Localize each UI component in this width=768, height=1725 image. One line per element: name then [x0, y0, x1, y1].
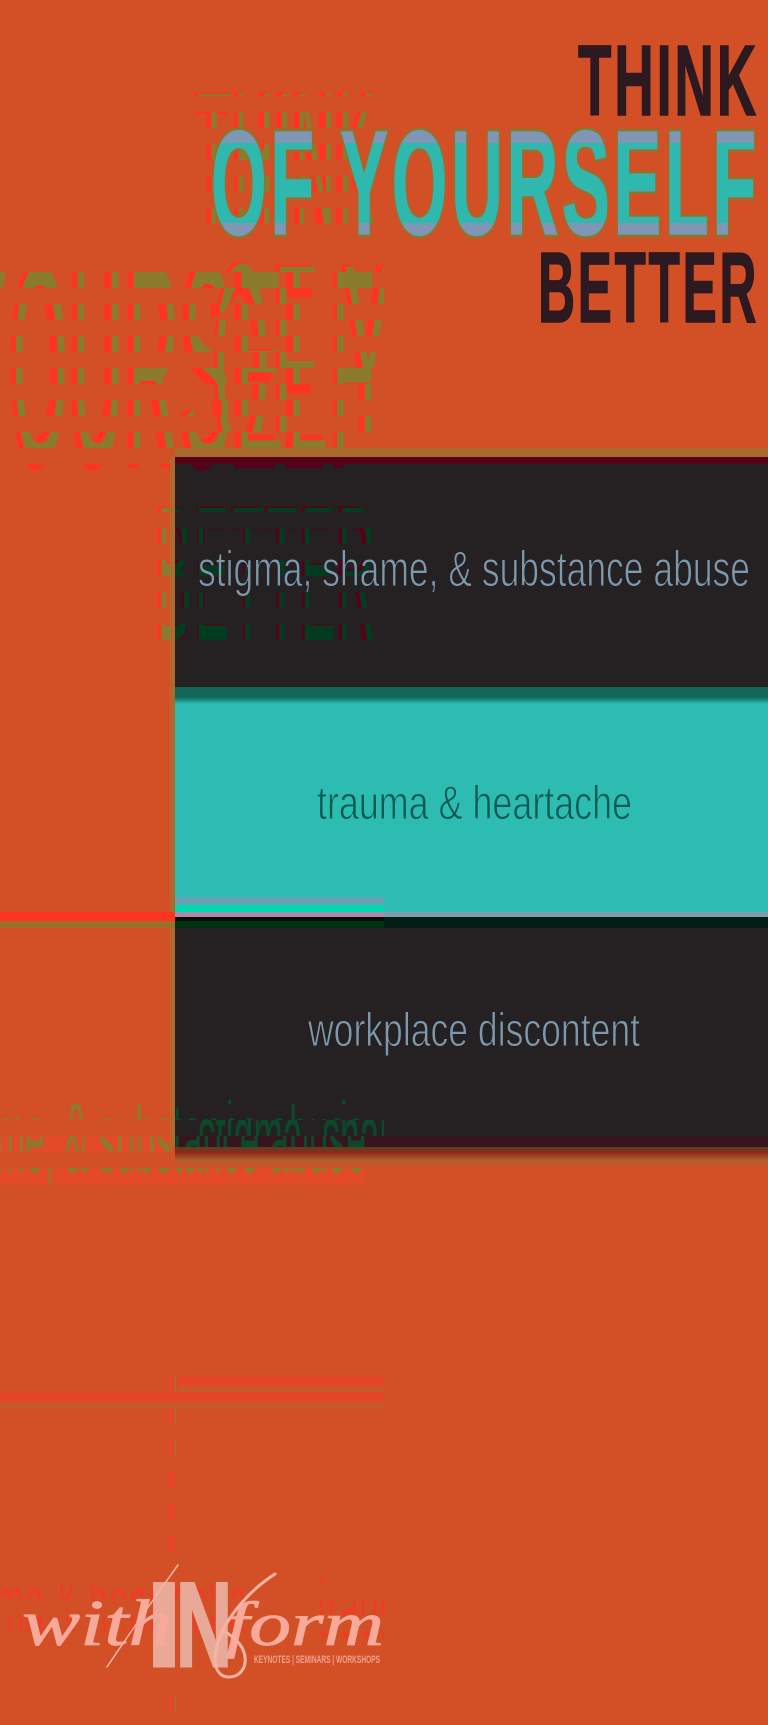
glitch ghost: stretched title copies: THINK [194, 49, 375, 273]
glitch ghost: stretched title copies: BETTER [157, 468, 378, 682]
panel: workplace [175, 912, 768, 1168]
glitch ghost: horizontal lines [0, 912, 384, 1408]
ghost rows inside dark panel: BETTER [157, 468, 378, 682]
logo: IN: N [176, 1558, 232, 1692]
logo: IN: I [146, 1558, 182, 1692]
ghost rows inside dark panel [175, 464, 373, 640]
glitch ghost: stretched subtitle copies [0, 1104, 384, 1638]
logo [22, 1558, 384, 1692]
logo: tagline: KEYNOTES | SEMINARS | WORKSHOPS [254, 1654, 380, 1666]
logo: with: with [22, 1587, 172, 1660]
ghost rows inside dark panel [175, 1100, 384, 1147]
logo: form: form [226, 1591, 384, 1659]
panel: stigma [170, 448, 768, 1147]
text: workplace: workplace discontent [307, 1003, 640, 1056]
title line: OF YOURSELF [212, 128, 755, 238]
glitch ghost: stretched title copies [0, 92, 384, 640]
logo: flourishes [107, 1565, 275, 1677]
panel: trauma [175, 687, 768, 912]
logo: IN [146, 1558, 232, 1692]
title [212, 44, 758, 324]
glitch ghost: stretched title copies: THINK [197, 54, 378, 268]
ghost rows inside dark panel: BETTER [154, 463, 375, 687]
glitch ghost: stretched subtitle copies: trauma & heartache [317, 1553, 632, 1658]
text: trauma: trauma & heartache [317, 776, 632, 829]
glitch ghost: stretched title copies: BETTER [154, 463, 375, 687]
glitch ghost: dashed vertical line [168, 1376, 176, 1712]
